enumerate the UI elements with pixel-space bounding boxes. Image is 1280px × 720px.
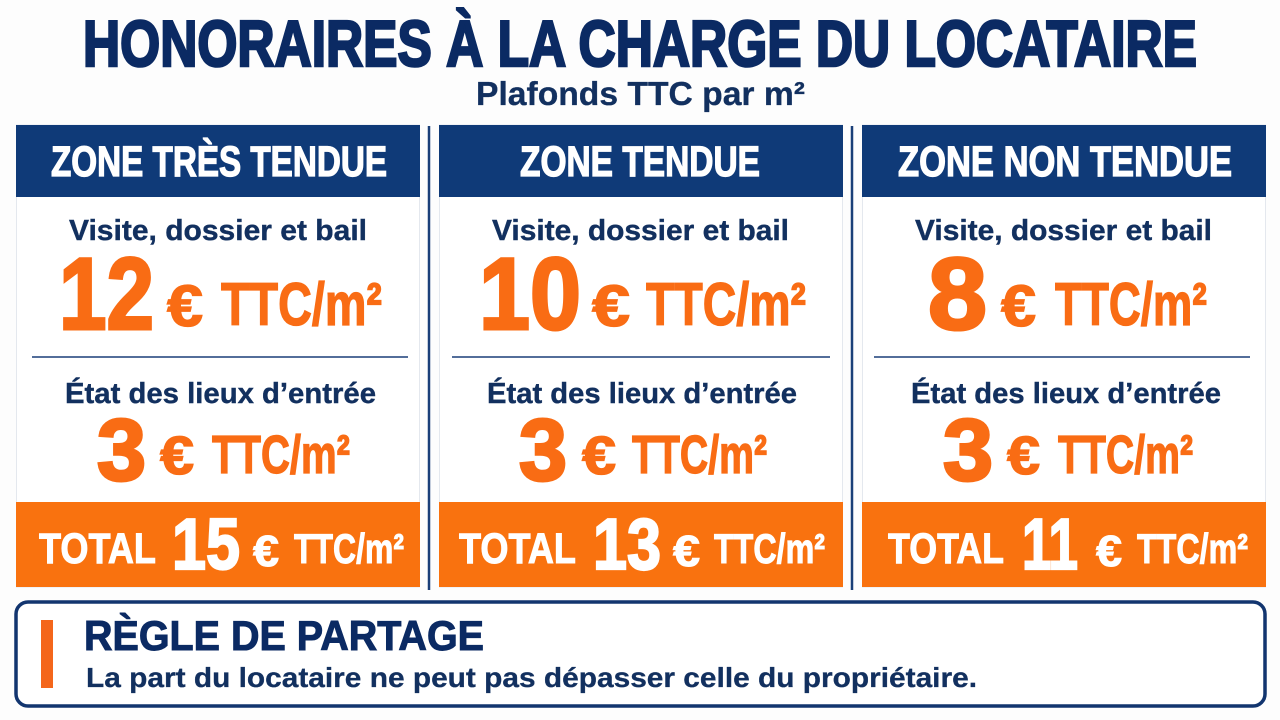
total: 11 euros TTC par m² <box>862 502 1266 587</box>
label: visite, dossier et bail: Visite, dossier et bail <box>69 215 367 247</box>
total: 13 euros TTC par m²: TTC/m² <box>714 525 825 572</box>
price: 3 euros TTC par m²: 3 <box>519 402 567 499</box>
price: 3 euros TTC par m²: TTC/m² <box>212 425 350 485</box>
label: état des lieux d'entrée: État des lieux d’entrée <box>65 376 376 410</box>
panel: zone très tendue <box>16 125 420 587</box>
price: 8 euros TTC par m²: TTC/m² <box>1055 271 1207 338</box>
header: zone tendue <box>439 125 843 197</box>
total: 11 euros TTC par m²: TTC/m² <box>1137 525 1248 572</box>
price: 3 euros TTC par m²: € <box>160 426 194 486</box>
price: 3 euros TTC par m² <box>519 402 767 499</box>
total: 13 euros TTC par m²: TOTAL <box>459 525 576 573</box>
header: zone tendue: ZONE TENDUE <box>520 138 760 186</box>
price: 3 euros TTC par m²: 3 <box>97 402 146 499</box>
price: 10 euros TTC par m²: TTC/m² <box>646 271 806 338</box>
price: 12 euros TTC par m²: € <box>167 274 203 339</box>
total: 13 euros TTC par m² <box>439 502 843 587</box>
panel: zone non tendue <box>862 125 1266 587</box>
header: zone très tendue <box>16 125 420 197</box>
header: zone non tendue <box>862 125 1266 197</box>
price: 12 euros TTC par m²: TTC/m² <box>221 271 382 338</box>
price: 8 euros TTC par m² <box>928 237 1207 351</box>
total: 15 euros TTC par m² <box>16 502 420 587</box>
label: état des lieux d'entrée: État des lieux d’entrée <box>911 376 1221 410</box>
price: 3 euros TTC par m² <box>97 402 350 499</box>
total: 15 euros TTC par m²: TTC/m² <box>294 525 404 572</box>
price: 8 euros TTC par m²: € <box>1001 274 1036 339</box>
price: 8 euros TTC par m²: 8 <box>928 237 987 351</box>
price: 12 euros TTC par m² <box>59 237 382 351</box>
label: état des lieux d'entrée: État des lieux d’entrée <box>487 376 797 410</box>
total: 13 euros TTC par m²: 13 <box>593 505 661 585</box>
price: 12 euros TTC par m²: 12 <box>59 237 154 351</box>
total: 11 euros TTC par m²: € <box>1096 527 1122 576</box>
price: 3 euros TTC par m²: 3 <box>943 402 993 499</box>
total: 15 euros TTC par m²: € <box>253 527 279 576</box>
total: 15 euros TTC par m²: TOTAL <box>39 525 156 573</box>
price: 10 euros TTC par m²: € <box>592 274 630 339</box>
callout: règle de partage <box>16 602 1265 706</box>
label: visite, dossier et bail: Visite, dossier et bail <box>915 215 1212 247</box>
header: zone très tendue: ZONE TRÈS TENDUE <box>51 138 387 186</box>
price: 3 euros TTC par m² <box>943 402 1193 499</box>
callout text: La part du locataire ne peut pas dépasser celle du propriétaire. <box>86 662 977 693</box>
price: 10 euros TTC par m² <box>479 237 806 351</box>
price: 3 euros TTC par m²: TTC/m² <box>632 425 767 485</box>
price: 3 euros TTC par m²: TTC/m² <box>1058 425 1193 485</box>
label: visite, dossier et bail: Visite, dossier et bail <box>492 215 789 247</box>
price: 3 euros TTC par m²: € <box>582 426 616 486</box>
price: 10 euros TTC par m²: 10 <box>479 237 581 351</box>
subtitle: Plafonds TTC par m² <box>476 75 805 112</box>
total: 11 euros TTC par m²: TOTAL <box>888 525 1004 573</box>
callout heading: RÈGLE DE PARTAGE <box>84 612 484 659</box>
total: 11 euros TTC par m²: 11 <box>1022 505 1078 585</box>
total: 13 euros TTC par m²: € <box>673 527 700 576</box>
price: 3 euros TTC par m²: € <box>1007 426 1040 486</box>
icon: orange accent bar <box>41 620 53 688</box>
panel: zone tendue <box>439 125 843 587</box>
total: 15 euros TTC par m²: 15 <box>172 505 240 585</box>
